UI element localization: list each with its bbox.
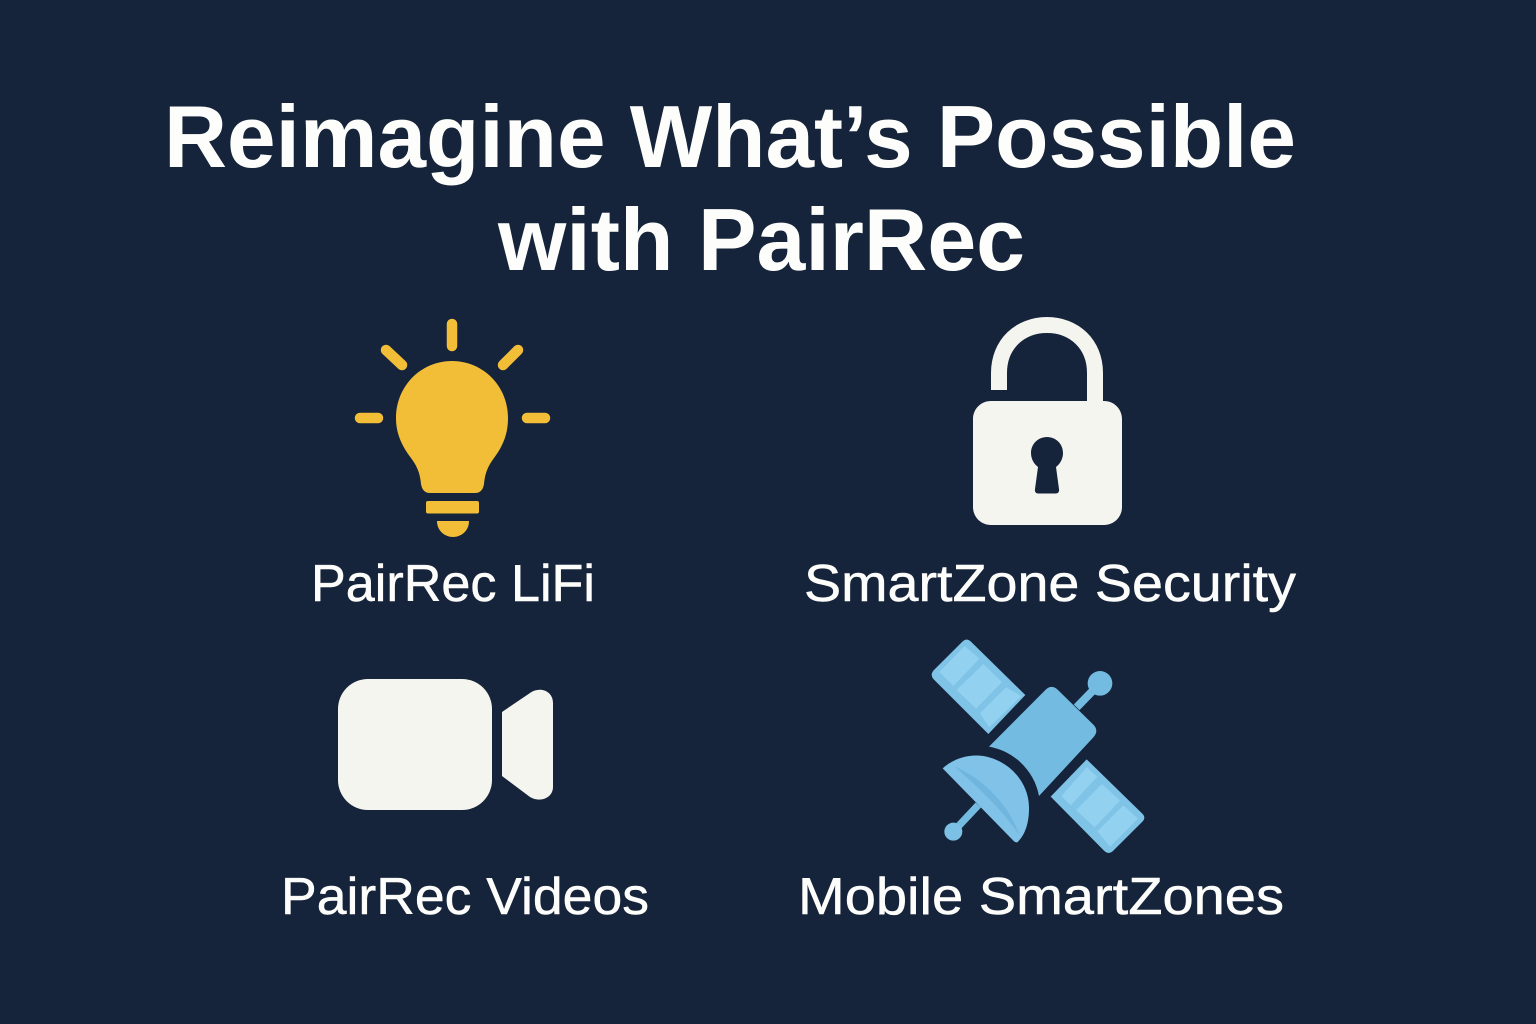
icon: satellite: [932, 639, 1144, 853]
solar panel: upper: [932, 639, 1025, 734]
dish with stalk: [943, 755, 1029, 842]
satellite body: [989, 687, 1096, 796]
icon: light bulb: [360, 324, 545, 537]
title: Reimagine What’s Possible: [164, 87, 1296, 186]
antenna: [1077, 671, 1112, 707]
title: [164, 87, 1296, 289]
label: Mobile SmartZones: Mobile SmartZones: [798, 868, 1284, 926]
icon: video camera: [338, 679, 553, 810]
label: PairRec Videos: PairRec Videos: [281, 868, 649, 926]
title: with PairRec: [497, 190, 1025, 289]
label: SmartZone Security: SmartZone Security: [804, 555, 1296, 613]
icon: padlock: [973, 325, 1122, 525]
solar panel: lower: [1051, 759, 1144, 853]
label: PairRec LiFi: PairRec LiFi: [311, 555, 595, 613]
